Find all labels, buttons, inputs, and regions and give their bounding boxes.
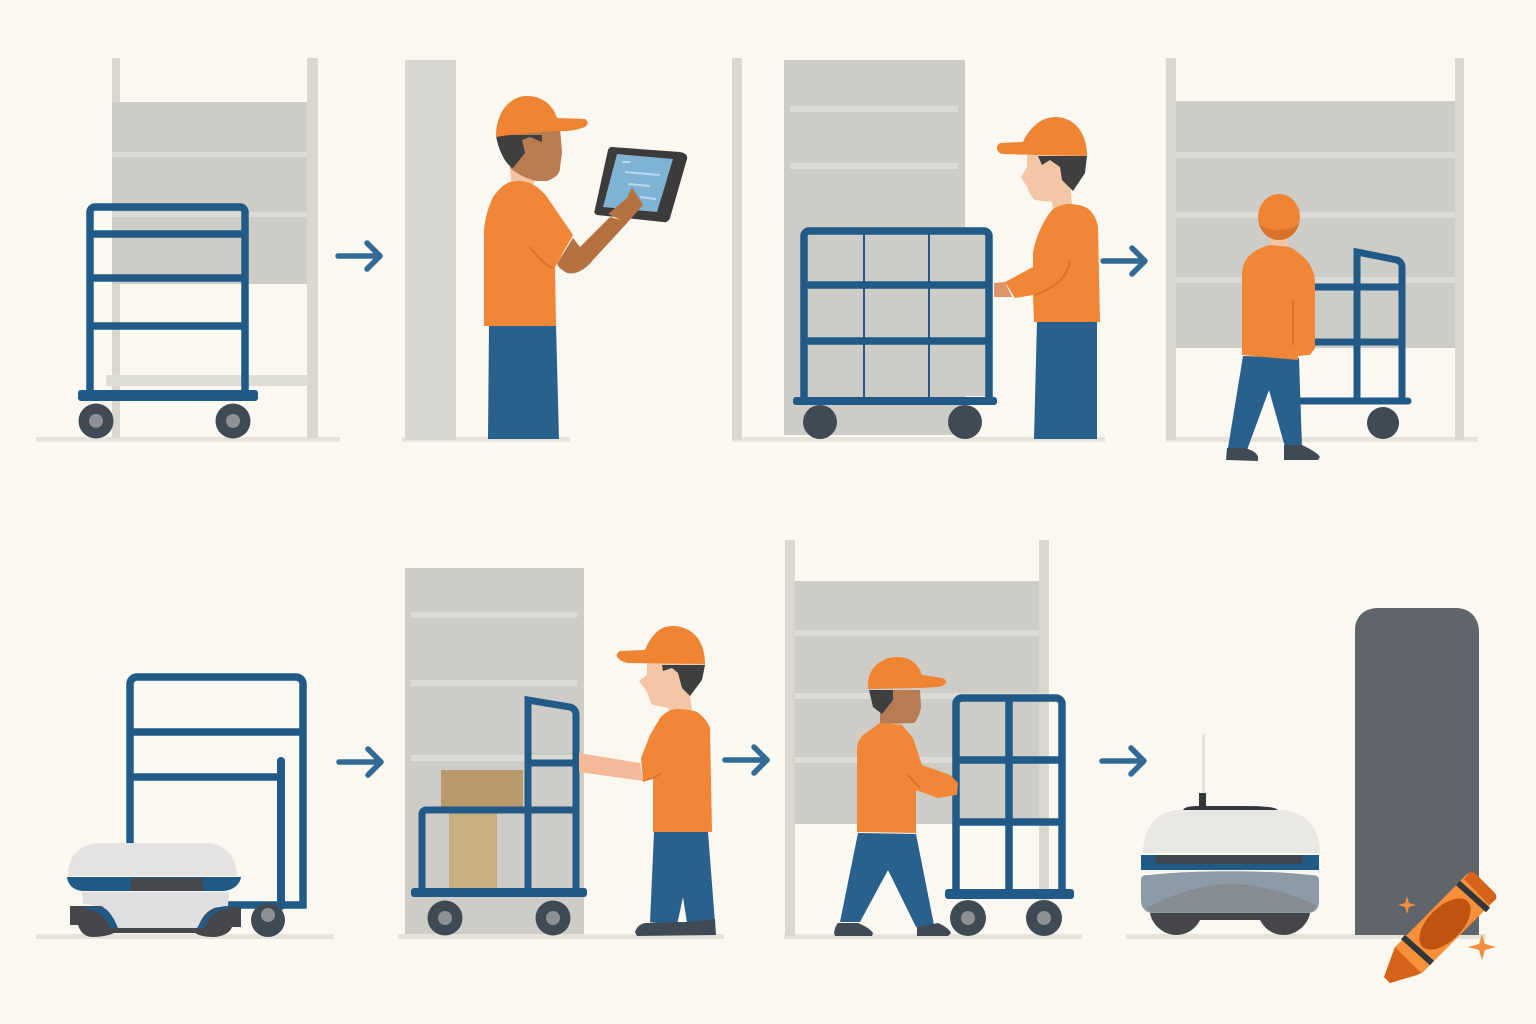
arrow: step 1 to 2 — [338, 243, 380, 269]
panel: step 8 robot at dark door — [1126, 608, 1496, 983]
panel: step 2 worker using tablet — [402, 60, 687, 442]
cart: loading cart — [411, 700, 587, 936]
panel: step 4 worker walking away with cart — [1166, 58, 1478, 461]
icon: robot with antenna — [1141, 734, 1320, 935]
icon: cardboard box — [441, 770, 523, 888]
icon: delivery robot — [67, 843, 241, 937]
figure: worker walking right — [834, 657, 958, 936]
door: dark charging station — [1355, 608, 1479, 935]
figure: worker facing left — [994, 117, 1100, 439]
arrow: step 5 to 6 — [339, 749, 381, 775]
cart: tall cart on robot — [130, 677, 303, 937]
arrow: step 6 to 7 — [725, 747, 767, 773]
figure: worker facing left with arm out — [579, 626, 716, 936]
cart: cart with dividers — [793, 231, 997, 439]
panel: step 5 robot under cart — [36, 677, 334, 939]
panel: step 1 empty cart in front of rack — [36, 58, 340, 442]
cart: side view cart — [1298, 252, 1408, 439]
figure: worker from behind — [1226, 194, 1320, 461]
figure: worker with tablet — [484, 96, 687, 439]
arrow: step 3 to 4 — [1103, 248, 1145, 274]
panel: step 7 worker pulling cart — [784, 540, 1082, 939]
panel: step 3 worker pushing loaded cart — [732, 58, 1105, 442]
cart: tall cart with centre post — [945, 698, 1074, 936]
panel: step 6 worker loading box onto cart — [398, 568, 724, 939]
icon: tablet — [594, 147, 687, 222]
arrow: step 7 to 8 — [1102, 748, 1144, 774]
icon: orange crayon with sparkles — [1384, 872, 1496, 983]
cart: empty blue cart — [78, 207, 258, 438]
